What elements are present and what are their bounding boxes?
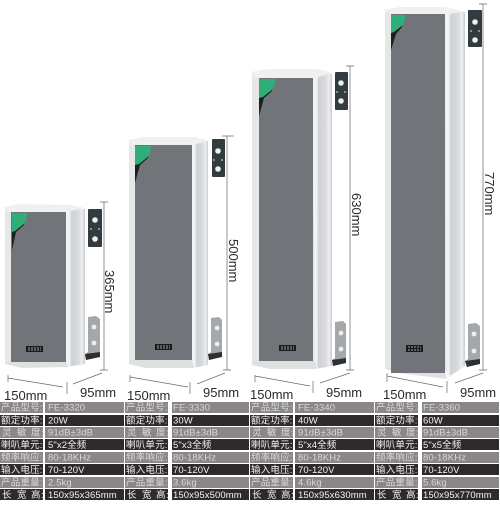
row: driver units: 喇叭单元:	[376, 439, 418, 451]
row: dimensions: 150x95x770mm	[423, 490, 492, 501]
row: dimensions	[0, 489, 499, 501]
row: input voltage: 70-120V	[423, 465, 460, 476]
row: weight: 4.6kg	[298, 478, 322, 488]
width and depth labels: 150mm	[4, 388, 47, 403]
row: weight: 3.6kg	[173, 478, 197, 488]
row: weight	[0, 476, 499, 488]
row: weight: 产品重量:	[1, 476, 43, 488]
row: dimensions: 长宽高:	[377, 489, 419, 501]
row: driver units: 喇叭单元:	[126, 439, 168, 451]
row: input voltage: 输入电压:	[251, 464, 293, 476]
row: sensitivity: 灵敏度:	[377, 426, 419, 438]
height labels	[102, 172, 497, 313]
row: model: FE-3320	[48, 402, 85, 414]
row: power: 20W	[48, 416, 68, 426]
width and depth labels: 150mm	[383, 387, 426, 402]
row: driver units	[0, 439, 499, 451]
row: weight: 产品重量:	[376, 476, 418, 488]
row: power: 额定功率:	[1, 414, 43, 426]
specification table	[0, 402, 499, 501]
row: sensitivity: 灵敏度:	[2, 426, 44, 438]
row: input voltage: 输入电压:	[376, 464, 418, 476]
width and depth labels: 95mm	[460, 385, 496, 400]
speaker FE-3330	[128, 137, 225, 368]
row: model: FE-3340	[298, 402, 335, 414]
row: frequency response: 80-18KHz	[173, 452, 216, 464]
row: sensitivity	[0, 426, 499, 438]
row: power: 40W	[298, 416, 318, 426]
row: frequency response: 频率响应:	[251, 452, 293, 464]
row: driver units: 5"x2全频	[48, 439, 87, 451]
height labels: 365mm	[102, 270, 117, 313]
speaker FE-3320	[4, 204, 102, 368]
row: frequency response: 80-18KHz	[298, 452, 341, 464]
width and depth labels: 95mm	[203, 385, 239, 400]
row: dimensions: 150x95x500mm	[173, 490, 242, 501]
row: weight: 2.5kg	[48, 478, 72, 488]
row: input voltage	[0, 464, 499, 476]
row: input voltage: 70-120V	[48, 465, 85, 476]
dimension lines	[8, 4, 487, 394]
row: weight: 产品重量:	[126, 476, 168, 488]
row: frequency response: 80-18KHz	[423, 452, 466, 464]
row: model: 产品型号:	[251, 402, 293, 414]
row: frequency response: 80-18KHz	[48, 452, 91, 464]
row: power: 额定功率:	[251, 414, 293, 426]
row: weight: 5.6kg	[423, 478, 447, 488]
row: power	[0, 414, 499, 426]
row: sensitivity: 91dB±3dB	[173, 428, 218, 438]
row: power: 额定功率:	[126, 414, 168, 426]
speaker FE-3360	[384, 7, 482, 379]
row: power: 30W	[173, 416, 193, 426]
width and depth labels: 150mm	[250, 387, 293, 402]
row: frequency response: 频率响应:	[376, 452, 418, 464]
row: model	[0, 402, 499, 414]
row: sensitivity: 灵敏度:	[127, 426, 169, 438]
row: input voltage: 70-120V	[298, 465, 335, 476]
row: model: 产品型号:	[1, 402, 43, 414]
row: dimensions: 长宽高:	[252, 489, 294, 501]
width and depth labels	[4, 385, 496, 403]
row: frequency response	[0, 452, 499, 464]
row: input voltage: 输入电压:	[126, 464, 168, 476]
row: frequency response: 频率响应:	[1, 452, 43, 464]
height labels: 630mm	[349, 193, 364, 236]
row: sensitivity: 91dB±3dB	[298, 428, 343, 438]
row: sensitivity: 灵敏度:	[252, 426, 294, 438]
width and depth labels: 95mm	[326, 385, 362, 400]
row: driver units: 喇叭单元:	[1, 439, 43, 451]
width and depth labels: 95mm	[80, 385, 116, 400]
row: dimensions: 150x95x630mm	[298, 490, 367, 501]
speaker FE-3340	[251, 69, 348, 369]
row: sensitivity: 91dB±3dB	[423, 428, 468, 438]
row: dimensions: 长宽高:	[127, 489, 169, 501]
row: model: 产品型号:	[126, 402, 168, 414]
row: power: 60W	[423, 416, 443, 426]
height labels: 770mm	[482, 172, 497, 215]
row: model: FE-3330	[173, 402, 210, 414]
width and depth labels: 150mm	[127, 388, 170, 403]
row: dimensions: 长宽高:	[2, 489, 44, 501]
row: model: 产品型号:	[376, 402, 418, 414]
row: driver units: 5"x5全频	[423, 439, 462, 451]
row: input voltage: 70-120V	[173, 465, 210, 476]
row: sensitivity: 91dB±3dB	[48, 428, 93, 438]
row: weight: 产品重量:	[251, 476, 293, 488]
row: model: FE-3360	[423, 402, 460, 414]
row: driver units: 5"x3全频	[173, 439, 212, 451]
row: driver units: 5"x4全频	[298, 439, 337, 451]
row: frequency response: 频率响应:	[126, 452, 168, 464]
row: driver units: 喇叭单元:	[251, 439, 293, 451]
row: power: 额定功率:	[376, 414, 418, 426]
height labels: 500mm	[226, 239, 241, 282]
row: dimensions: 150x95x365mm	[48, 490, 117, 501]
row: input voltage: 输入电压:	[1, 464, 43, 476]
